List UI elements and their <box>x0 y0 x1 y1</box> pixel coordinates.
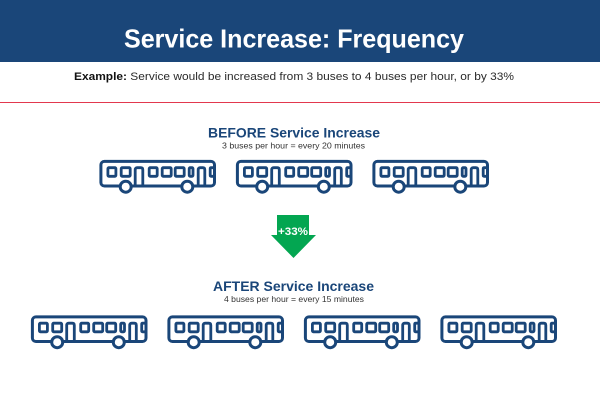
after buses row <box>32 317 555 348</box>
after subtext: 4 buses per hour = every 15 minutes <box>224 294 364 304</box>
icon: bus 3 <box>305 317 419 348</box>
icon: bus 2 <box>169 317 282 348</box>
before heading: BEFORE Service Increase <box>208 124 380 140</box>
example text: Example: Service would be increased from 3 buses to 4 buses per hour, or by 33% <box>74 71 514 83</box>
icon: bus 3 <box>374 161 488 192</box>
arrow: +33% increase: +33% <box>278 226 308 238</box>
title: Service Increase: Frequency <box>124 24 465 54</box>
after heading: AFTER Service Increase <box>213 278 374 294</box>
icon: bus 1 <box>101 161 214 192</box>
red divider <box>0 102 600 103</box>
before subtext: 3 buses per hour = every 20 minutes <box>222 140 365 150</box>
icon: bus 4 <box>442 317 556 348</box>
icon: bus 2 <box>237 161 351 192</box>
before buses row <box>101 161 488 192</box>
icon: bus 1 <box>32 317 146 348</box>
arrow: +33% increase <box>271 215 316 258</box>
header banner <box>0 0 600 62</box>
